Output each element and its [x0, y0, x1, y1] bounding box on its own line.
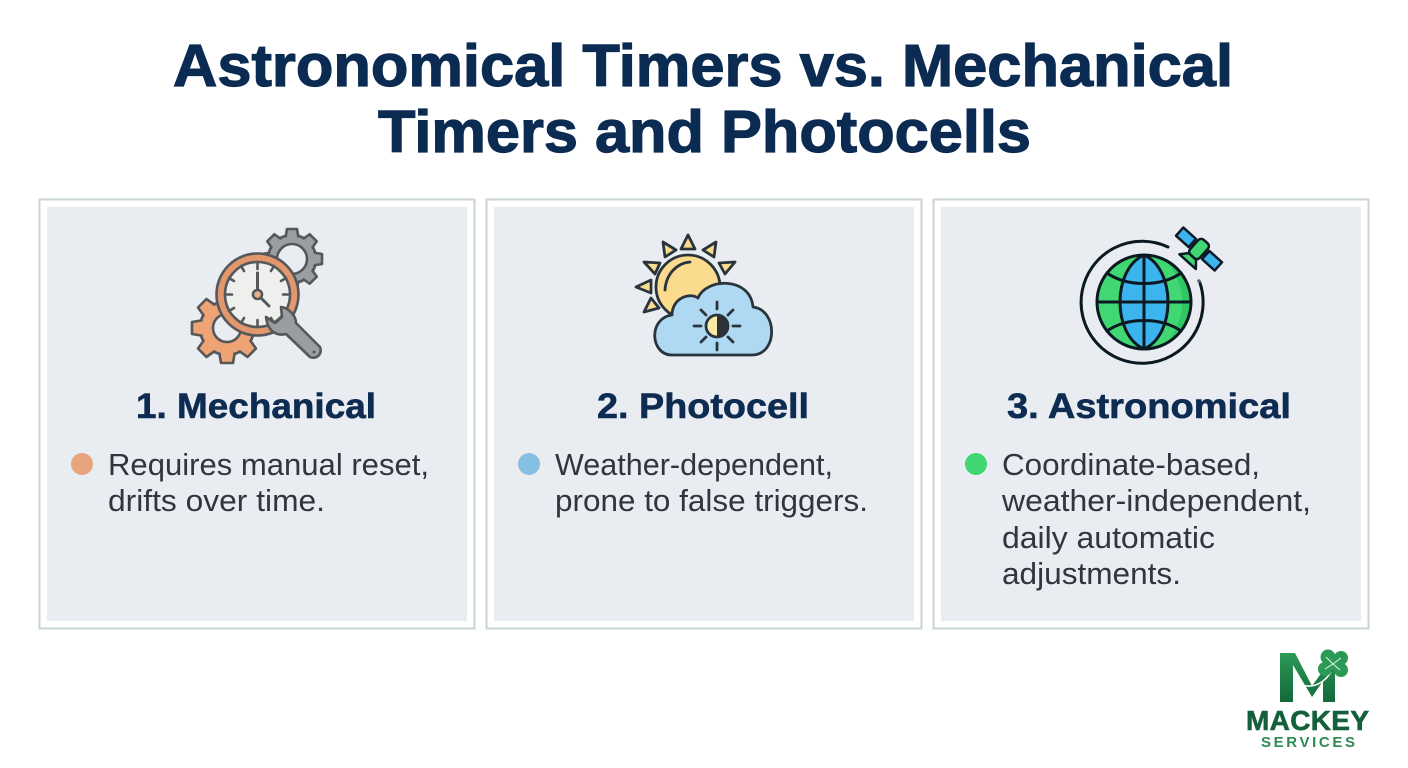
text block: Coordinate-based,	[1002, 447, 1260, 482]
orbit ring	[1081, 241, 1203, 363]
text block: prone to false triggers.	[555, 483, 868, 518]
globe	[1097, 255, 1191, 349]
bullet	[71, 453, 93, 475]
sun	[656, 255, 720, 319]
half sun symbol	[694, 302, 740, 350]
bullet	[518, 453, 540, 475]
title	[173, 33, 1233, 165]
heading: 3. Astronomical	[1007, 387, 1291, 426]
text block: daily automatic	[1002, 520, 1215, 555]
text block: drifts over time.	[108, 483, 325, 518]
text block	[1001, 447, 1311, 591]
clock face	[216, 254, 298, 336]
bullet	[965, 453, 987, 475]
icon: M monogram	[1280, 653, 1335, 702]
sun rays	[636, 235, 735, 312]
orange gear	[192, 293, 262, 363]
sub wordmark: SERVICES	[1261, 734, 1355, 751]
satellite	[1168, 224, 1225, 279]
wrench	[266, 307, 321, 358]
text block: adjustments.	[1002, 556, 1181, 591]
heading: 2. Photocell	[597, 387, 809, 426]
cloud	[655, 283, 772, 355]
icon: globe and satellite	[1081, 224, 1225, 363]
heading: 1. Mechanical	[136, 387, 376, 426]
panel: mechanical	[40, 200, 474, 628]
title: Timers and Photocells	[378, 99, 1031, 165]
logo: Mackey Services	[1246, 650, 1369, 751]
text block: weather-independent,	[1001, 483, 1311, 518]
gray gear	[262, 229, 322, 289]
icon: clock with gears and wrench	[192, 229, 322, 363]
panel: photocell	[486, 200, 922, 628]
text block: Weather-dependent,	[555, 447, 833, 482]
text block	[108, 447, 429, 518]
wordmark: MACKEY	[1246, 705, 1369, 736]
icon: shamrock	[1318, 650, 1348, 677]
panel: astronomical	[934, 200, 1368, 628]
title: Astronomical Timers vs. Mechanical	[173, 33, 1233, 99]
text block: Requires manual reset,	[108, 447, 429, 482]
icon: sun and cloud	[636, 235, 772, 355]
text block	[555, 447, 868, 518]
